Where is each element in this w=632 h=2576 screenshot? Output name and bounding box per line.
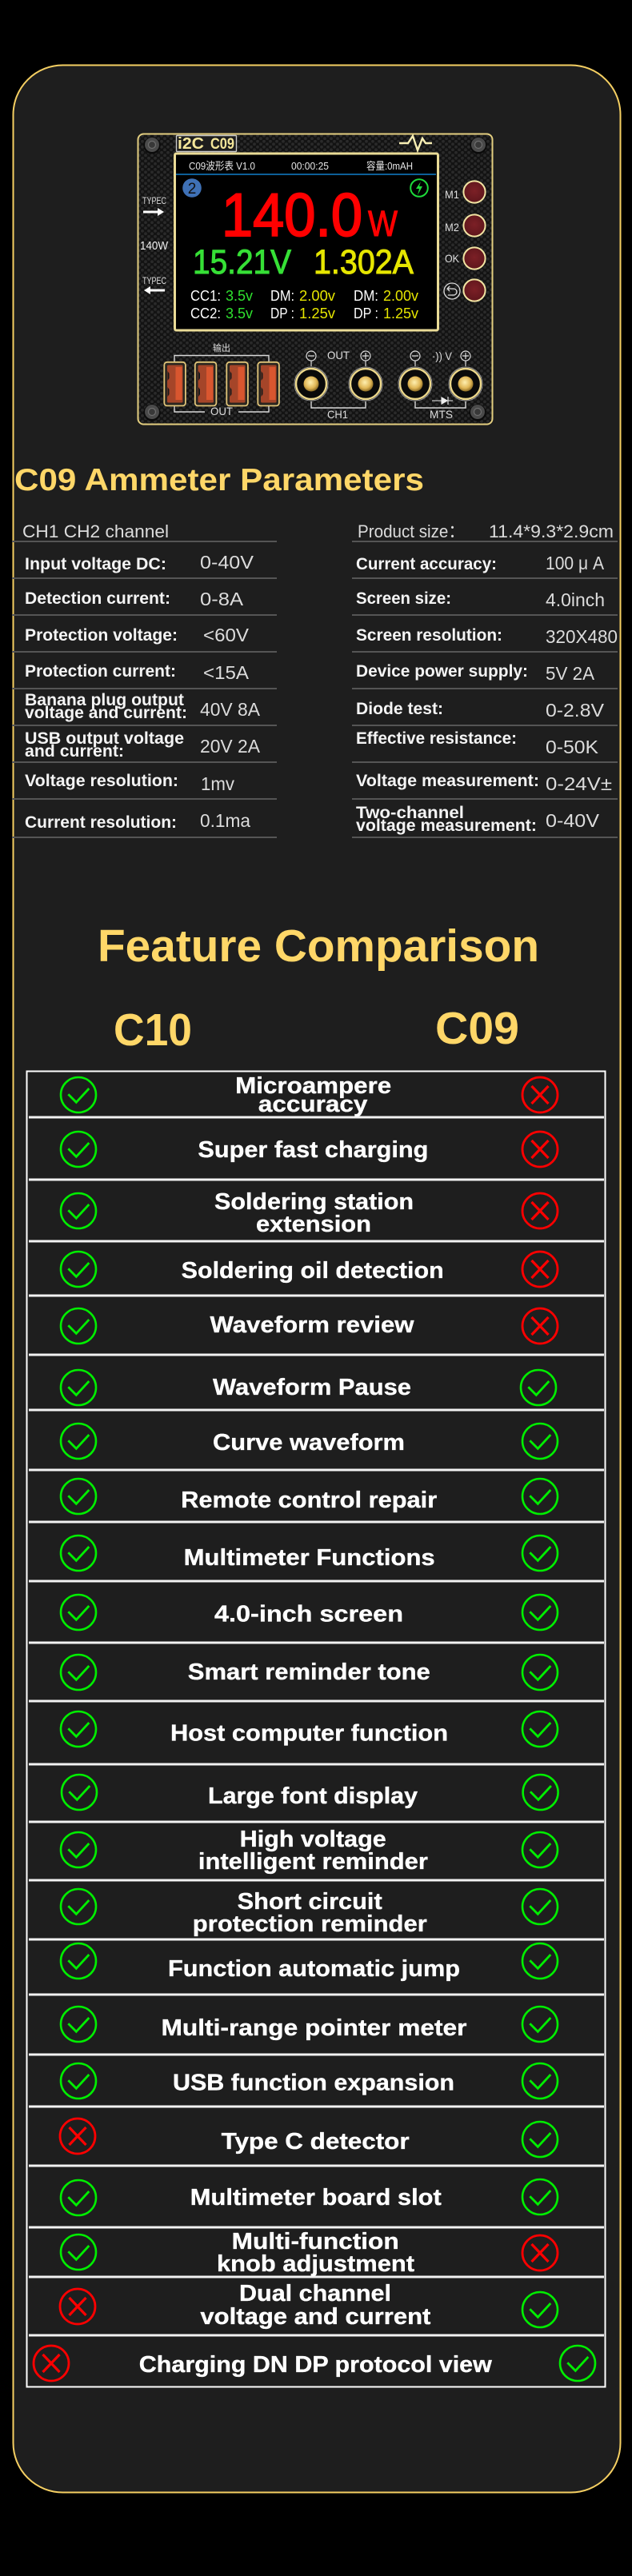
row: Microampere accuracy [61,1073,558,1117]
CC and data line readings: 2.00v [383,288,418,304]
row: Multi-function knob adjustment [61,2229,558,2277]
parameter table: left column: Banana plug output [25,691,184,709]
left labels: Type-C ports and arrows [140,197,169,294]
icon: channel 2 badge [182,178,202,198]
parameter table: left column: Detection current: [25,589,170,608]
row: 4.0-inch screen [61,1595,558,1630]
USB output ports [164,342,279,417]
CC and data line readings: DP : [270,306,294,322]
row: Soldering oil detection: Soldering oil detection [182,1258,444,1284]
row: Multi-function knob adjustment: knob adjustment [217,2251,414,2277]
parameter table: left column: Protection voltage: [25,626,178,645]
power reading: 140.0 [222,182,362,250]
screen header: 00:00:25 [291,160,329,172]
parameter table: right column: Diode test: [356,700,443,718]
row: Host computer function: Host computer function [170,1721,448,1747]
brand badge: i2C C09 [176,135,237,153]
brand badge: i2C C09: C09 [210,136,234,153]
banana sockets: CH1: CH1 [327,408,348,421]
row: High voltage intelligent reminder [61,1827,558,1875]
side buttons: M1 M2 OK back: OK [445,252,460,265]
icon: channel 2 badge: 2 [188,181,196,198]
parameter table: right column: 4.0inch [546,589,605,610]
heading: Feature Comparison: Feature Comparison [98,921,539,972]
row: Large font display: Large font display [208,1783,418,1809]
screen display [174,154,438,330]
row: Soldering oil detection [61,1252,558,1287]
parameter table: right column: 0-40V [546,810,600,831]
parameter table: left column: USB output voltage [25,729,184,748]
row: Short circuit protection reminder: Short circuit [238,1889,382,1915]
parameter table: left column: voltage and current: [25,704,187,722]
banana sockets: MTS [398,349,482,421]
CC and data line readings: DP : [354,306,378,322]
parameter table: left column: 0.1ma [200,810,250,831]
row: Dual channel voltage and current: Dual channel [239,2281,391,2306]
banana sockets: CH1: OUT [327,349,350,361]
screen header: C09波形表 V1.0 [189,160,255,172]
parameter table: left column: Protection current: [25,662,176,681]
icon: waveform logo [399,136,432,150]
parameter table: left column: CH1 CH2 channel [22,521,169,541]
row: Super fast charging: Super fast charging [198,1137,428,1163]
row: Super fast charging [61,1132,558,1167]
CC and data line readings: DM: [270,288,294,304]
side buttons: M1 M2 OK back: M2 [445,221,459,234]
USB output ports: OUT [210,405,233,417]
CC and data line readings: CC2: [190,306,221,322]
parameter table: left column: Input voltage DC: [25,555,166,573]
row: USB function expansion [61,2063,558,2099]
row: Large font display [62,1775,558,1810]
row: Charging DN DP protocol view [34,2346,595,2381]
CC and data line readings: 3.5v [226,288,253,304]
parameter table: left column: and current: [25,742,124,761]
row: Dual channel voltage and current [60,2281,558,2330]
row: Soldering station extension: Soldering station [214,1189,414,1215]
brand badge: i2C C09: i2C [178,135,204,153]
parameter table: right column: 100 μ A [546,553,605,573]
row: Remote control repair [61,1479,558,1514]
parameter table: right column: 320X480 [546,626,618,647]
row: Smart reminder tone: Smart reminder tone [188,1659,430,1685]
parameter table: left column: Current resolution: [25,813,177,832]
power reading: W [368,203,398,244]
parameter table: left column: <15A [203,662,250,683]
row: Remote control repair: Remote control repair [181,1488,437,1513]
row: Waveform Pause: Waveform Pause [213,1375,411,1400]
CC and data line readings: DM: [354,288,378,304]
row: High voltage intelligent reminder: intelligent reminder [198,1849,428,1875]
parameter table: right column: 0-2.8V [546,700,605,721]
current reading: 1.302A [314,243,414,282]
banana sockets: MTS: MTS [430,408,453,421]
parameter table: right column: Device power supply: [356,662,528,681]
parameter table: left column: 20V 2A [200,736,261,757]
row: Function automatic jump: Function automatic jump [168,1956,460,1982]
row: Host computer function [61,1711,558,1747]
row: Charging DN DP protocol view: Charging DN DP protocol view [139,2352,492,2378]
parameter table: left column: 0-8A [200,589,244,609]
parameter table: right column: Two-channel [356,804,464,822]
row: Curve waveform: Curve waveform [213,1430,405,1456]
icon: screws [144,138,486,421]
row: Microampere accuracy: Microampere [235,1073,391,1099]
row: Function automatic jump [61,1943,558,1982]
CC and data line readings: 2.00v [299,288,335,304]
comparison table frame [27,1072,605,2386]
column heading: C09: C09 [435,1003,519,1054]
row: Multi-function knob adjustment: Multi-function [232,2229,399,2254]
row: Short circuit protection reminder [61,1889,558,1937]
screen header [176,160,436,175]
parameter table: left column: 40V 8A [200,699,261,720]
banana sockets: MTS: ·)) V [432,349,453,362]
screen header: 容量:0mAH [366,160,413,172]
voltage reading: 15.21V [193,243,291,282]
row: Dual channel voltage and current: voltage and current [200,2304,431,2330]
left labels: Type-C ports and arrows: 140W [140,239,169,253]
row: Multi-range pointer meter [61,2007,558,2042]
USB output ports: 输出 [213,342,230,353]
column heading: C10: C10 [114,1004,192,1056]
row: Curve waveform [61,1424,558,1459]
CC and data line readings: 3.5v [226,306,253,322]
parameter table: right column: 0-50K [546,737,599,757]
row: Multimeter board slot [61,2179,558,2215]
heading: C09 Ammeter Parameters: C09 Ammeter Parameters [14,463,424,497]
product image: C09 ammeter device [138,134,493,424]
row: Smart reminder tone [61,1655,558,1690]
row: 4.0-inch screen: 4.0-inch screen [214,1601,403,1627]
parameter table: left column: 1mv [201,773,234,794]
parameter table: right column: Effective resistance: [356,729,517,748]
row: Multimeter board slot: Multimeter board slot [190,2185,442,2211]
row: USB function expansion: USB function expansion [173,2070,454,2095]
banana sockets: CH1 [294,349,382,421]
parameter table: left column: <60V [203,625,250,645]
parameter table: right column: 11.4*9.3*2.9cm [489,521,614,541]
left labels: Type-C ports and arrows: TYPEC [142,277,166,286]
parameter table: right column [352,521,618,837]
CC and data line readings: CC1: [190,288,221,304]
CC and data line readings: 1.25v [383,306,418,322]
row: Waveform review [61,1308,558,1344]
parameter table: right column: 5V 2A [546,663,595,684]
row: Soldering station extension: extension [256,1212,371,1237]
parameter table: left column [12,521,277,837]
icon: charging bolt [410,179,428,197]
parameter table: right column: Screen resolution: [356,626,502,645]
row: Multimeter Functions: Multimeter Functions [184,1545,435,1571]
parameter table: right column: Screen size: [356,589,451,608]
CC and data line readings: 1.25v [299,306,335,322]
CC and data line readings [190,288,418,322]
row: Type C detector: Type C detector [222,2129,410,2155]
row: Microampere accuracy: accuracy [258,1092,367,1117]
parameter table: right column: Product size： [358,521,465,541]
left labels: Type-C ports and arrows: TYPEC [142,197,166,206]
row: Short circuit protection reminder: protection reminder [193,1911,427,1937]
row: Multimeter Functions [61,1536,558,1571]
row: Soldering station extension [61,1189,558,1237]
row: Waveform review: Waveform review [210,1312,414,1338]
row: High voltage intelligent reminder: High voltage [240,1827,386,1852]
parameter table: right column: Current accuracy: [356,555,497,573]
parameter table: left column: Voltage resolution: [25,772,178,790]
row: Multi-range pointer meter: Multi-range pointer meter [162,2015,467,2041]
parameter table: right column: Voltage measurement: [356,772,539,790]
row: Type C detector [60,2119,558,2157]
parameter table: right column: voltage measurement: [356,817,537,835]
side buttons: M1 M2 OK back [444,181,486,302]
parameter table: right column: 0-24V± [546,773,612,794]
side buttons: M1 M2 OK back: M1 [445,188,459,201]
row: Waveform Pause [61,1370,556,1405]
parameter table: left column: 0-40V [200,552,254,573]
